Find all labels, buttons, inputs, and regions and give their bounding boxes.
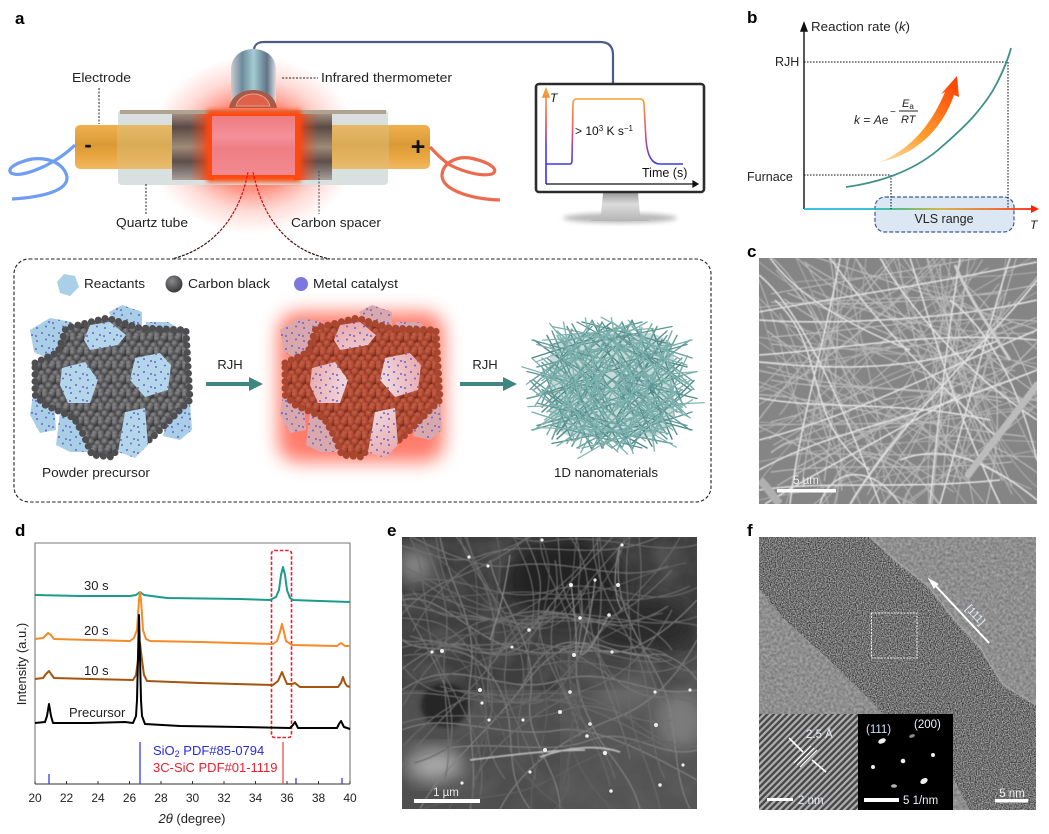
- panel letter f: f: [747, 521, 753, 540]
- electrode rod: [75, 125, 430, 169]
- x tick labels: 24: [91, 791, 105, 805]
- legend text: reactants: Reactants: [84, 276, 146, 291]
- panel letter e: e: [387, 521, 396, 540]
- temperature curve: [546, 99, 683, 164]
- inset: lattice fringes: 2 nm: [798, 795, 824, 807]
- x tick labels: 40: [343, 791, 357, 805]
- label: quartz tube: Quartz tube: [116, 215, 188, 230]
- legend 3C-SiC: 3C-SiC PDF#01-1119: [153, 760, 278, 775]
- arrhenius equation: [854, 98, 918, 127]
- curve 10 s: [35, 643, 350, 687]
- blue wire: [10, 145, 75, 199]
- panel b: reaction rate chart: [747, 8, 1039, 232]
- red wire: [430, 147, 500, 200]
- red highlight box: [272, 550, 292, 738]
- legend SiO2: SiO: [153, 743, 175, 758]
- growth direction arrow: [111]: [963, 603, 987, 628]
- selected area box: [872, 613, 917, 658]
- time axis: [546, 181, 698, 187]
- x axis: [804, 208, 1033, 210]
- scale bar 1 µm: 1 µm: [433, 787, 459, 799]
- scale bar 1 µm: [414, 787, 480, 803]
- icon: infrared thermometer: [229, 49, 277, 108]
- arrow: RJH step one: RJH: [217, 357, 243, 372]
- x tick labels: 20: [28, 791, 42, 805]
- label: electrode: Electrode: [72, 70, 131, 85]
- monitor screen: [536, 84, 704, 192]
- heated centre: [212, 116, 295, 175]
- x axis title: 2θ (degree): [157, 811, 226, 826]
- legend SiO2: PDF#85-0794: [180, 743, 264, 758]
- panel e: SEM micrograph: [388, 527, 697, 809]
- scale bar 5 nm: [995, 788, 1028, 802]
- carbon heat fade right: [294, 114, 318, 180]
- arrhenius equation: E: [902, 98, 909, 110]
- x tick labels: 26: [123, 791, 136, 805]
- arrhenius equation: −: [890, 107, 896, 118]
- arrow: RJH step two: [460, 357, 517, 391]
- quartz tube and electrodes: [75, 110, 430, 185]
- label: electrode: [72, 70, 131, 124]
- label 20 s: 20 s: [84, 623, 109, 638]
- monitor stand: [563, 193, 677, 223]
- label furnace: Furnace: [747, 170, 793, 184]
- carbon spacer left: [172, 114, 214, 180]
- label: 1D nanomaterials: 1D nanomaterials: [554, 465, 659, 480]
- panel d: XRD chart: [14, 521, 357, 826]
- curve 30 s: [35, 567, 350, 602]
- inset: diffraction pattern: (111): [866, 724, 891, 736]
- growth direction arrow: [929, 579, 989, 643]
- hot orange band: [207, 110, 301, 182]
- arrow: RJH step one: [206, 357, 263, 391]
- x tick labels: 36: [280, 791, 294, 805]
- heating rate label: K s: [603, 124, 624, 138]
- x tick labels: 32: [217, 791, 231, 805]
- panel letter c: c: [747, 242, 756, 261]
- label 10 s: 10 s: [84, 663, 109, 678]
- arrhenius equation: a: [909, 102, 914, 111]
- x axis with ticks: [35, 781, 350, 784]
- arrow: rising rate: [880, 76, 959, 162]
- panel a: reactor and process: [10, 9, 716, 502]
- x tick labels: 30: [186, 791, 199, 805]
- label precursor: Precursor: [69, 705, 126, 720]
- label: quartz tube: [116, 184, 188, 230]
- positive terminal: +: [411, 133, 425, 161]
- inset: diffraction pattern: 5 1/nm: [903, 795, 938, 807]
- curve 20 s: [35, 592, 350, 646]
- icon: carbon black: [166, 276, 182, 292]
- arrhenius equation: RT: [901, 114, 917, 126]
- panel f: TEM micrograph: [747, 521, 1036, 810]
- axis label T: T: [550, 91, 559, 105]
- monitor with temperature profile: [536, 84, 704, 223]
- inset: lattice fringes: [759, 714, 858, 810]
- label: powder precursor: Powder precursor: [42, 465, 151, 480]
- temperature axis: [543, 89, 549, 184]
- label RJH: RJH: [775, 55, 799, 69]
- x axis arrowhead: [1031, 205, 1039, 213]
- inset: diffraction pattern: (200): [914, 719, 941, 731]
- carbon spacer right: [294, 114, 332, 180]
- label T: T: [1030, 218, 1039, 232]
- heated cube: [278, 305, 444, 462]
- plot frame: [35, 543, 350, 784]
- x tick labels: 34: [249, 791, 262, 805]
- scale bar 5 nm: 5 nm: [999, 788, 1025, 800]
- reference lines: [49, 742, 342, 784]
- arrhenius equation: k = Ae: [854, 113, 889, 127]
- inset: lattice fringes: 2.5 Å: [806, 728, 833, 741]
- legend text: metal catalyst: Metal catalyst: [313, 276, 398, 291]
- y axis title: Intensity (a.u.): [14, 623, 29, 705]
- panel c: SEM micrograph: [748, 248, 1037, 504]
- heating glow: [148, 56, 358, 234]
- heating rate label: > 10: [575, 124, 599, 138]
- scale bar 5 µm: [777, 475, 836, 492]
- x tick labels: 38: [312, 791, 325, 805]
- label VLS range: VLS range: [914, 212, 974, 226]
- y axis: [801, 23, 807, 209]
- quartz tube overlay right: [332, 125, 389, 169]
- carbon heat fade left: [190, 114, 214, 180]
- legend: [57, 274, 398, 296]
- cable from thermometer to monitor: [254, 42, 613, 84]
- heating rate label: −1: [624, 124, 634, 133]
- quartz tube overlay: [117, 125, 172, 169]
- label: infrared thermometer: Infrared thermometer: [321, 70, 453, 85]
- VLS range box: [875, 197, 1014, 232]
- nanowire bundle: [512, 298, 716, 471]
- panel letter a: a: [15, 9, 25, 28]
- panel letter b: b: [747, 8, 757, 27]
- SEM image: [759, 258, 1037, 504]
- label 30 s: 30 s: [84, 578, 109, 593]
- arrow: RJH step two: RJH: [472, 357, 498, 372]
- icon: reactant crystal: [57, 274, 79, 296]
- curve precursor: [35, 615, 350, 729]
- x tick labels: 22: [60, 791, 73, 805]
- dotted guides: [804, 62, 1008, 209]
- label: carbon spacer: Carbon spacer: [291, 215, 382, 230]
- powder precursor cube: [30, 305, 192, 458]
- y axis title: Reaction rate ( k): [811, 20, 910, 34]
- scale bar 5 µm: 5 µm: [793, 475, 819, 487]
- negative terminal: -: [84, 132, 92, 157]
- heating rate label: 3: [599, 124, 604, 133]
- x tick labels: 28: [154, 791, 168, 805]
- panel letter d: d: [15, 521, 25, 540]
- quartz tube back: [118, 110, 388, 185]
- legend text: carbon black: Carbon black: [188, 276, 271, 291]
- SEM image: [402, 537, 697, 809]
- x tick labels: [28, 791, 357, 805]
- label: carbon spacer: [291, 171, 382, 230]
- legend SiO2: 2: [175, 749, 180, 759]
- panel: process box: [14, 259, 711, 502]
- TEM image: [759, 537, 1036, 810]
- zoom connector curves: [172, 172, 330, 259]
- arrhenius curve: [846, 48, 1011, 187]
- inset: diffraction pattern: [858, 714, 953, 810]
- axis label time: Time (s): [642, 166, 687, 180]
- icon: metal catalyst: [294, 277, 308, 291]
